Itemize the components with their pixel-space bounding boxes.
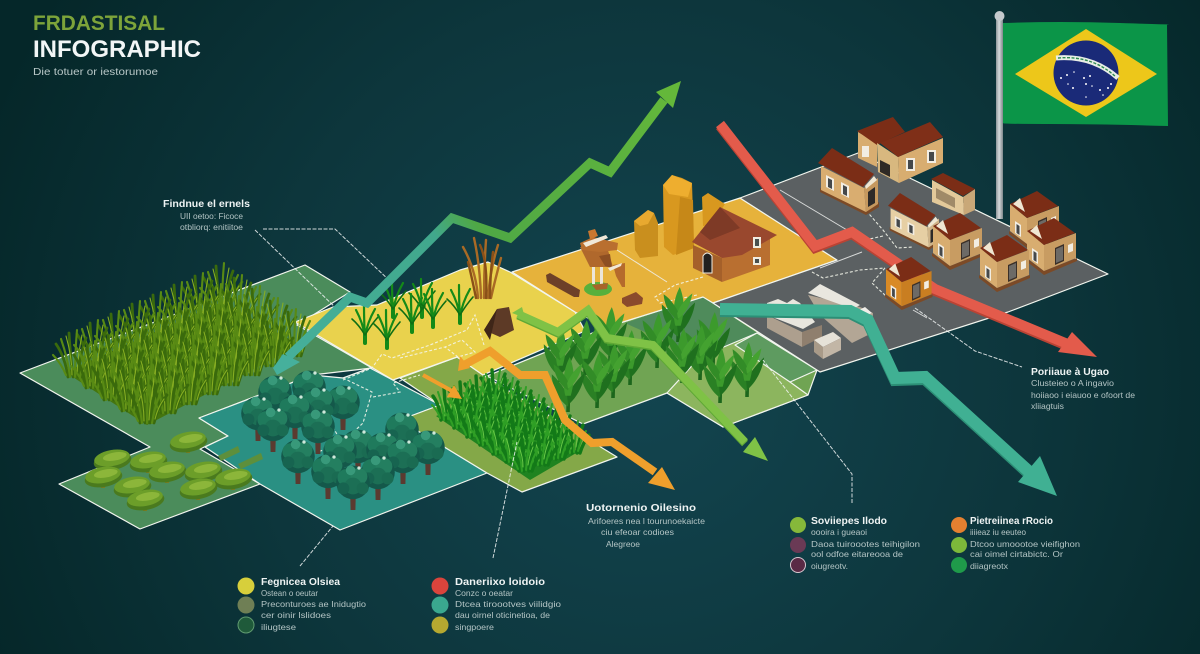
town houses (818, 117, 1077, 310)
panel: light corn plot (667, 333, 808, 427)
brown reeds (463, 238, 501, 298)
legend 1: Preconturoes ae Inidugtio (261, 599, 366, 609)
legend 1 (238, 576, 366, 633)
road lines in town (617, 190, 927, 318)
legend 4: Pietreiinea rRocio (970, 515, 1053, 527)
house: large back (857, 117, 943, 183)
isometric land panels (20, 153, 1108, 530)
teal declining arrow (720, 309, 1057, 496)
callout: top left: UII oetoo: Ficoce (180, 211, 243, 221)
white band (1056, 58, 1118, 78)
farm props (546, 229, 643, 307)
leader lines (255, 229, 1022, 566)
melon bushes (83, 429, 263, 513)
field and road dashed paths (317, 207, 913, 452)
teal to green rising arrow (273, 81, 681, 375)
golden grain towers (634, 175, 725, 258)
legend dots (790, 517, 806, 572)
blue globe (1054, 40, 1118, 106)
legend 1: iliugtese (261, 622, 296, 632)
panel: corn strip (735, 333, 817, 382)
stars (1060, 71, 1112, 98)
legend 2: Conzc o oeatar (455, 588, 513, 598)
pole ball (994, 11, 1004, 21)
forest trees (241, 371, 445, 510)
panel: cane field (400, 357, 617, 492)
wooden farmhouse (692, 207, 777, 282)
cane plants (432, 370, 589, 480)
subtitle: Die totuer or iestorumoe (33, 66, 158, 78)
legend 3: Daoa tuiroootes teihigilon (811, 539, 920, 549)
callout: right: Poriiaue à Ugao (1031, 366, 1109, 378)
callout: right: xliiagtuis (1031, 401, 1064, 411)
callout: right: hoiiaoo i eiauoo e ofoort de (1031, 390, 1135, 400)
crate (622, 292, 643, 307)
legend dots (238, 578, 254, 633)
callout: centre: ciu efeoar codioes (601, 527, 674, 537)
legend 4: iiiieaz iu eeuteo (970, 527, 1026, 537)
callout: top left (163, 198, 250, 232)
light green declining arrow (512, 307, 768, 461)
legend 2 (432, 576, 561, 634)
title line: green: FRDASTISAL (33, 12, 165, 35)
flag pole (996, 16, 1003, 219)
legend dots (432, 578, 448, 634)
callout: right: Clusteieo o A ingavio (1031, 378, 1114, 388)
legend 1: Fegnicea Olsiea (261, 576, 340, 588)
callout: top left: Findnue el ernels (163, 198, 250, 210)
legend 1: Ostean o oeutar (261, 588, 318, 598)
legend 1: cer oinir lslidoes (261, 610, 331, 620)
legend 4: cai oimel cirtabictc. Or (970, 549, 1063, 559)
panel: rice field (20, 265, 372, 529)
seedlings on yellow field (352, 279, 473, 348)
carved animal (580, 229, 625, 290)
panel: dark corn plot (625, 297, 757, 357)
legend 3 (790, 515, 920, 572)
legend 2: Dtcea tiroootves viilidgio (455, 599, 561, 609)
grass patch (584, 282, 612, 296)
legend 4: Dtcoo umoootoe vieifighon (970, 539, 1080, 549)
legend 4 (951, 515, 1080, 573)
warehouse (767, 284, 873, 359)
house: orange (885, 257, 932, 310)
panel: orange farmstead (512, 198, 837, 327)
corn plants (544, 287, 764, 412)
legend 2: Daneriixo loidoio (455, 576, 545, 588)
bench (546, 273, 580, 297)
red declining arrow (720, 124, 1097, 357)
orange declining arrow (458, 351, 675, 490)
legend 2: singpoere (455, 622, 494, 632)
callout: centre: Uotornenio Oilesino (586, 502, 696, 514)
panel: grey town (713, 153, 1108, 372)
panel: forest (199, 368, 487, 530)
legend 3: Soviiepes Ilodo (811, 515, 887, 527)
wooden sign (484, 307, 514, 340)
rice plants (53, 263, 314, 425)
title line: white: INFOGRAPHIC (33, 36, 201, 63)
flag of Brazil (994, 11, 1169, 219)
legend 3: oiugreotv. (811, 561, 848, 571)
legend 3: oooira i gueaoi (811, 527, 867, 537)
panel: yellow field (295, 262, 585, 380)
flag cloth (1003, 22, 1169, 126)
callout: right (1031, 366, 1135, 411)
callout: centre: Arifoeres nea l tourunoekaicte (588, 516, 705, 526)
small orange arrow (423, 375, 462, 399)
house: light low (931, 173, 975, 215)
legend dots (951, 517, 967, 573)
yellow diamond (1015, 29, 1157, 117)
title block (33, 12, 201, 78)
legend 2: dau oirnel oticinetioa, de (455, 610, 550, 620)
legend 4: diiagreotx (970, 561, 1009, 571)
callout: centre (586, 502, 705, 549)
legend 3: ool odfoe eitareooa de (811, 549, 903, 559)
small troughs (218, 446, 263, 469)
callout: top left: otbliorq: enitiitoe (180, 222, 243, 232)
callout: centre: Alegreoe (606, 539, 640, 549)
panel: corn field (487, 297, 817, 427)
